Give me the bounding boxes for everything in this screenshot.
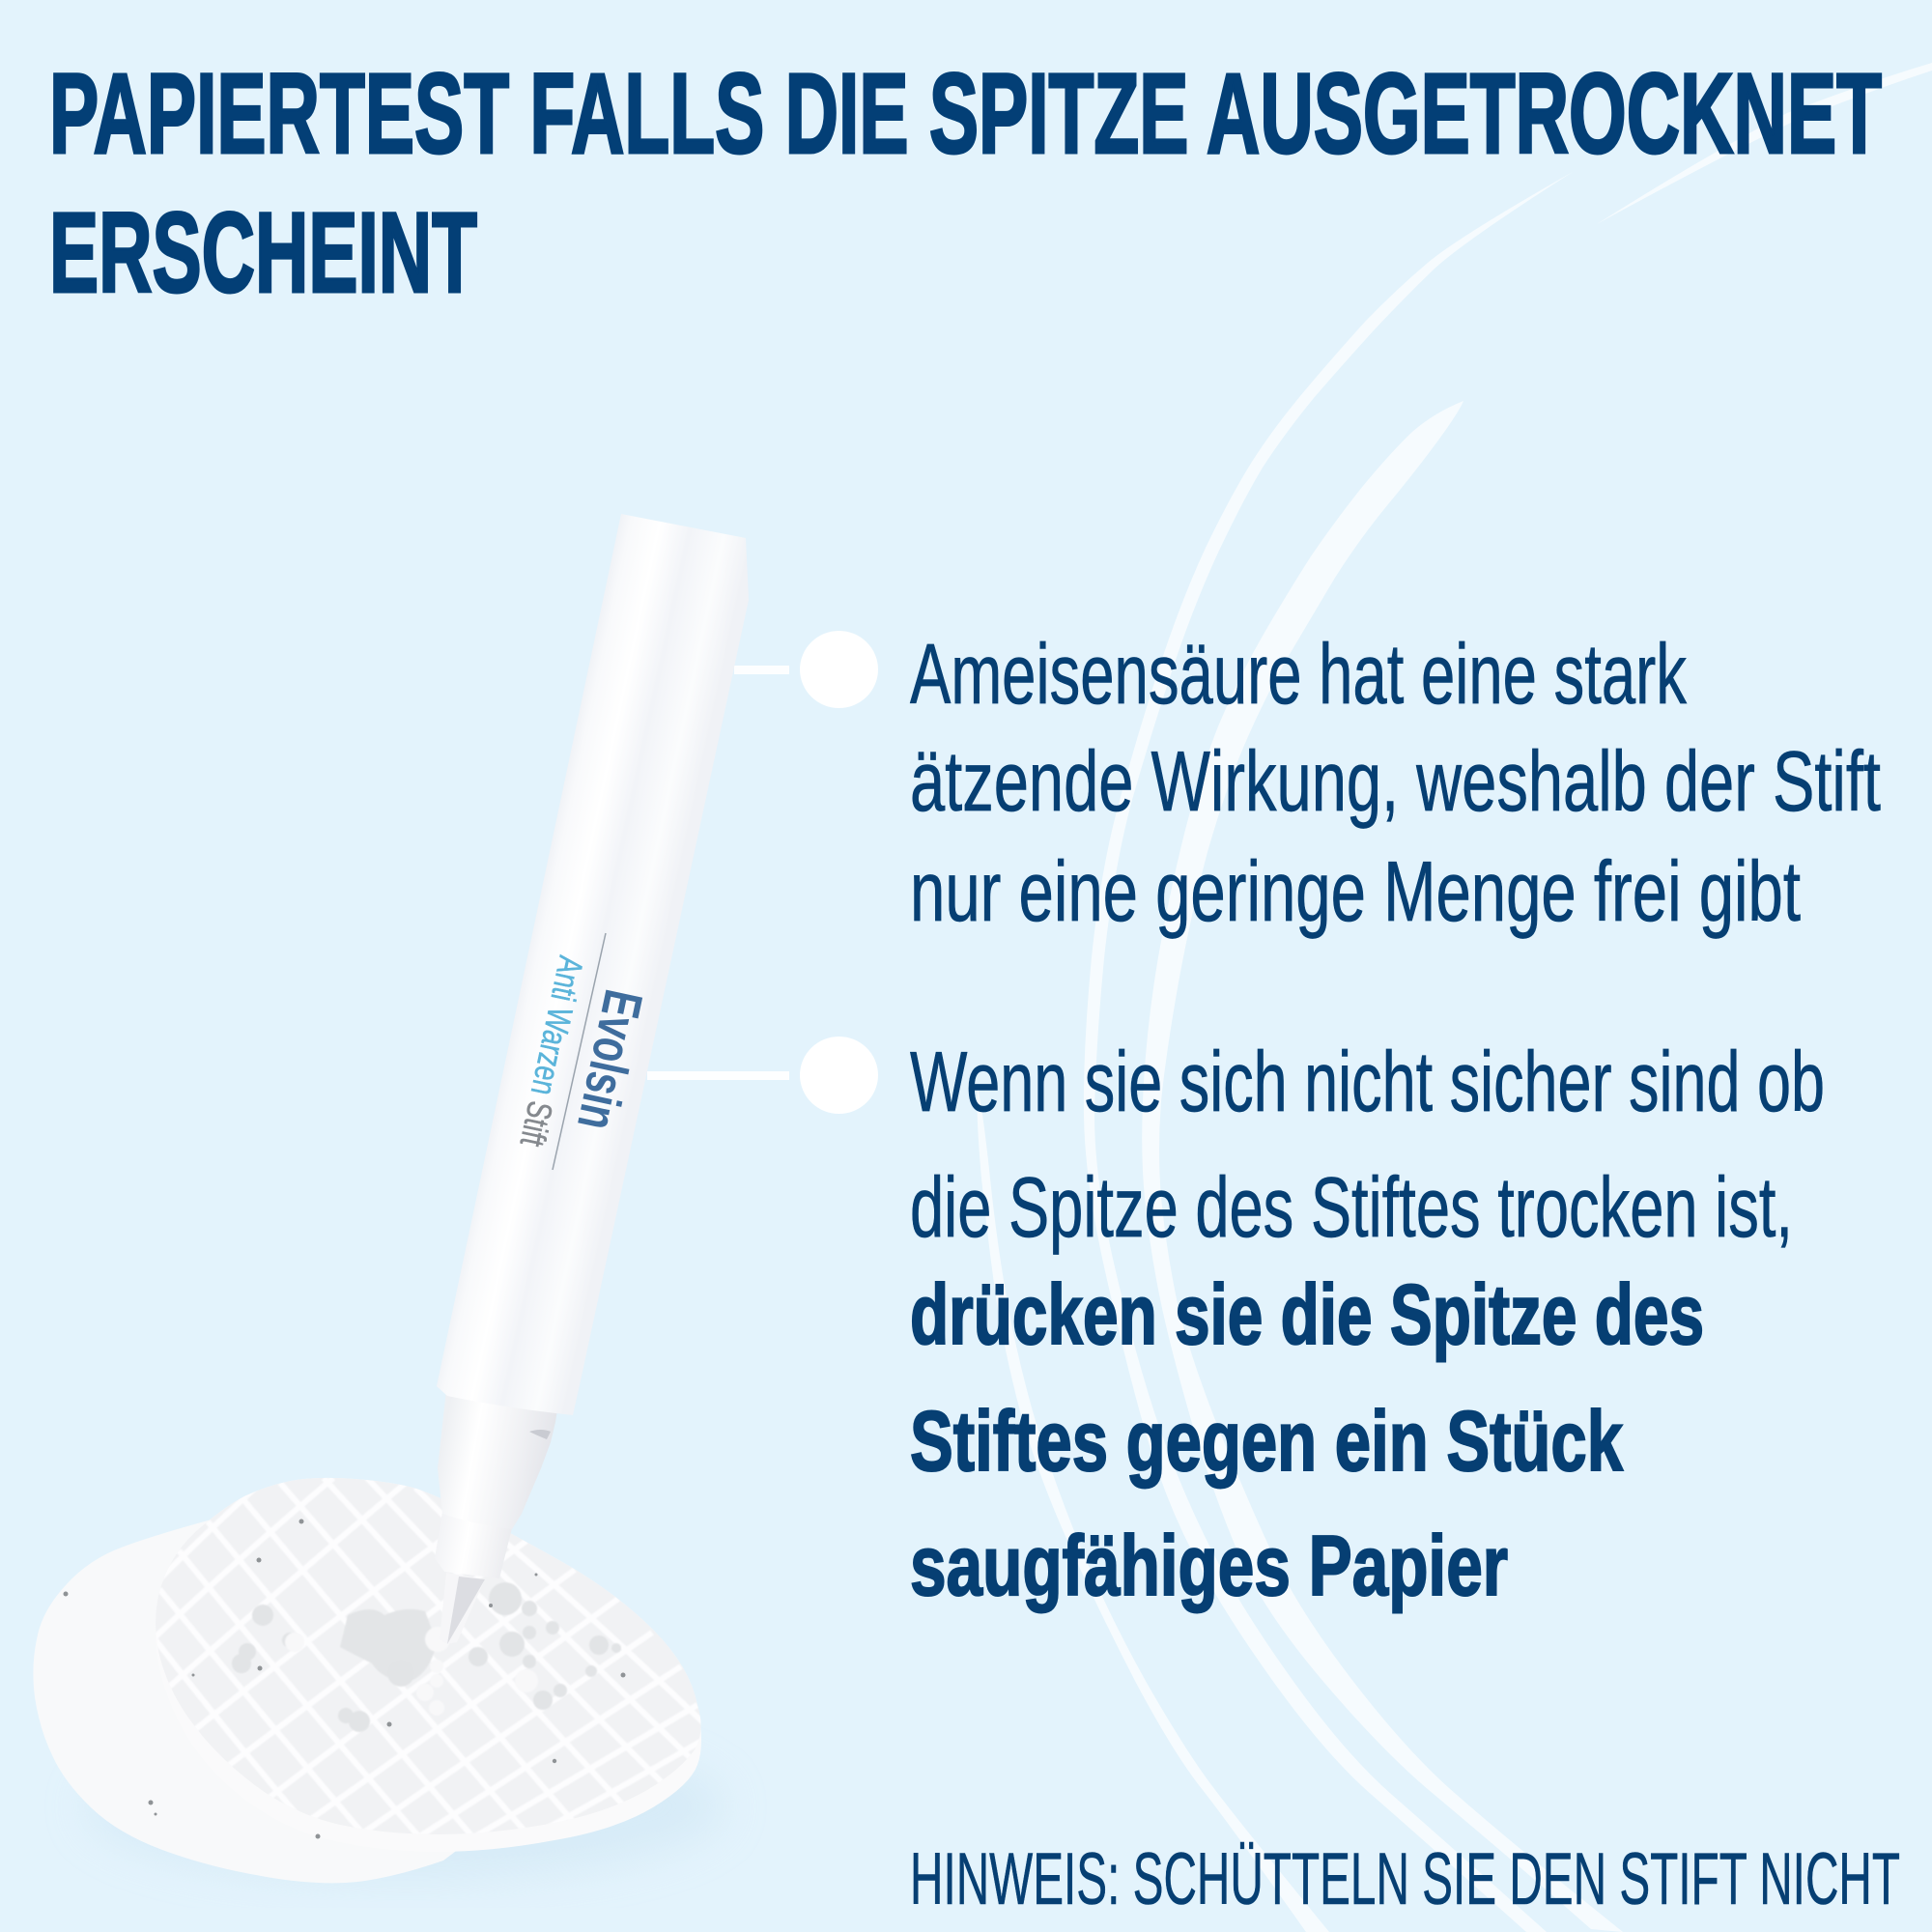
pen body [437, 514, 749, 1415]
text block 2: Stiftes gegen ein Stück [910, 1393, 1624, 1489]
brand name: Evolsin [566, 985, 655, 1135]
front cotton pad [64, 1478, 710, 1855]
decorative white swooshes [978, 63, 1932, 1932]
product name: Anti Warzen Stift [513, 952, 591, 1150]
bullet dot 2 [800, 1037, 878, 1114]
connector line 2 [647, 1071, 789, 1080]
illustration: cotton pads with stain [33, 1478, 724, 1883]
liquid stain [232, 1582, 621, 1732]
pen collar [438, 1381, 560, 1529]
specks [64, 1519, 626, 1839]
title [49, 50, 1882, 317]
text block 1 [910, 626, 1881, 939]
pen neck [435, 1512, 512, 1578]
illustration: Evolsin pen [435, 514, 749, 1644]
connector line 1 [734, 666, 789, 674]
title: ERSCHEINT [49, 189, 477, 317]
pen label [513, 952, 655, 1150]
pen tip [440, 1573, 485, 1644]
text block 2: saugfähiges Papier [910, 1518, 1508, 1613]
collar smudge [529, 1430, 551, 1439]
text block 2 [910, 1034, 1825, 1613]
pad shadow [87, 1734, 724, 1879]
back cotton pad [33, 1517, 502, 1883]
bullet dot 1 [800, 631, 878, 708]
